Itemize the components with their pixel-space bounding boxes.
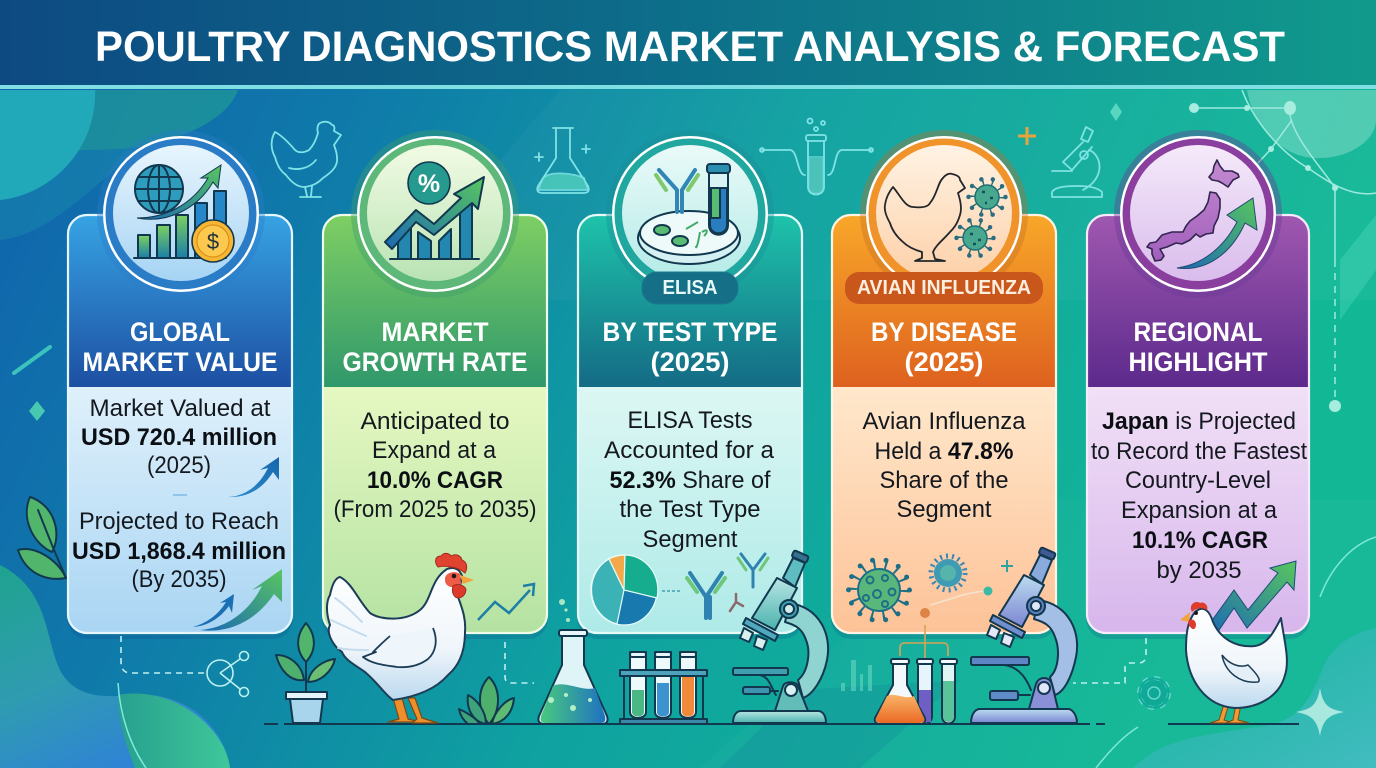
heading: GROWTH RATE — [342, 347, 528, 377]
text block: Anticipated to — [360, 408, 510, 435]
text block: USD 1,868.4 million — [72, 538, 286, 565]
heading — [342, 317, 528, 377]
illustration: small hen — [1180, 602, 1287, 723]
text block — [1091, 408, 1307, 584]
dashed connector with network icon — [121, 636, 248, 696]
text block — [72, 395, 286, 593]
icon: small trend line — [478, 584, 534, 620]
icon: potted plant — [276, 623, 335, 723]
icon: chicken outline — [272, 122, 341, 197]
badge: avian influenza: AVIAN INFLUENZA — [857, 277, 1031, 299]
decorative leaves — [18, 497, 66, 579]
text block: (From 2025 to 2035) — [334, 496, 536, 523]
title: POULTRY DIAGNOSTICS MARKET ANALYSIS & FORECAST — [95, 23, 1285, 71]
badge: ELISA: ELISA — [662, 277, 718, 299]
text block: Country-Level — [1125, 467, 1271, 494]
heading: REGIONAL — [1134, 317, 1262, 347]
text block: Share of the — [880, 467, 1008, 494]
heading: (2025) — [904, 347, 984, 377]
panel: regional highlight — [1086, 130, 1310, 639]
text block: (2025) — [147, 452, 211, 479]
panel: by disease — [831, 130, 1057, 639]
text block: ELISA Tests — [628, 407, 752, 434]
text block — [604, 407, 775, 553]
text block: Expand at a — [372, 437, 497, 464]
icon: zigzag arrow — [1205, 561, 1296, 633]
orange connector — [900, 625, 948, 658]
heading: (2025) — [650, 347, 730, 377]
text block: 52.3% Share of — [610, 467, 771, 494]
heading — [1128, 317, 1268, 377]
pie chart — [591, 555, 658, 625]
text block: by 2035 — [1156, 557, 1242, 584]
text block: Accounted for a — [604, 437, 775, 464]
text block: Segment — [896, 496, 992, 523]
icon: microscope outline — [1052, 127, 1102, 197]
badge: avian influenza — [845, 272, 1043, 304]
panel: market growth rate — [322, 130, 548, 639]
heading: BY TEST TYPE — [602, 317, 778, 347]
icon: test tube outline — [760, 118, 873, 194]
text block: Held a 47.8% — [874, 438, 1014, 465]
text block: 10.0% CAGR — [367, 467, 503, 494]
illustration: flask — [538, 599, 608, 724]
text block: the Test Type — [620, 496, 760, 523]
heading: HIGHLIGHT — [1128, 347, 1268, 377]
icon: globe, bars and coin — [97, 130, 265, 298]
panel: by test type — [577, 130, 803, 639]
bar deco — [841, 660, 872, 691]
illustration: teal microscope — [733, 550, 828, 723]
heading — [871, 317, 1017, 377]
icon: growth arrows — [193, 457, 282, 631]
heading: MARKET — [382, 317, 489, 347]
text block: Avian Influenza — [862, 408, 1026, 435]
dashed connector — [505, 642, 534, 683]
icon: petri dish and tube — [606, 130, 774, 304]
text block: Market Valued at — [90, 395, 271, 422]
heading: BY DISEASE — [871, 317, 1017, 347]
heading: GLOBAL — [130, 317, 230, 347]
icon: small plant — [459, 677, 514, 724]
text block — [334, 408, 536, 523]
text block: 10.1% CAGR — [1132, 527, 1268, 554]
title banner — [0, 0, 1376, 89]
text block: Segment — [642, 526, 738, 553]
text block: (By 2035) — [132, 566, 226, 593]
icon: flask outline — [535, 128, 590, 193]
icon: orange plus — [1018, 127, 1036, 145]
icon: percent and growth: % — [418, 170, 440, 198]
illustration: flask and tubes — [875, 659, 957, 724]
dashed connector with gear icon — [1073, 638, 1168, 708]
icon: percent and growth — [351, 130, 519, 298]
illustration: purple microscope — [971, 547, 1077, 723]
icon: Japan map and arrow — [1114, 130, 1282, 298]
text block — [862, 408, 1026, 523]
panel: global market value — [67, 130, 293, 639]
ground line — [264, 723, 1299, 725]
icon: hen and viruses — [845, 130, 1043, 304]
illustration: test tube rack — [620, 652, 707, 724]
icon: viruses — [848, 556, 1013, 620]
heading — [82, 317, 278, 377]
icon: antibodies — [687, 554, 768, 618]
text block: USD 720.4 million — [81, 424, 277, 451]
text block: to Record the Fastest — [1091, 438, 1307, 465]
badge: ELISA — [642, 272, 738, 304]
text block: Japan is Projected — [1102, 408, 1296, 435]
text block: Expansion at a — [1121, 497, 1278, 524]
text block: Projected to Reach — [79, 508, 279, 535]
illustration: large hen — [327, 553, 474, 723]
icon: globe, bars and coin: $ — [207, 229, 219, 254]
heading — [602, 317, 778, 377]
heading: MARKET VALUE — [82, 347, 278, 377]
